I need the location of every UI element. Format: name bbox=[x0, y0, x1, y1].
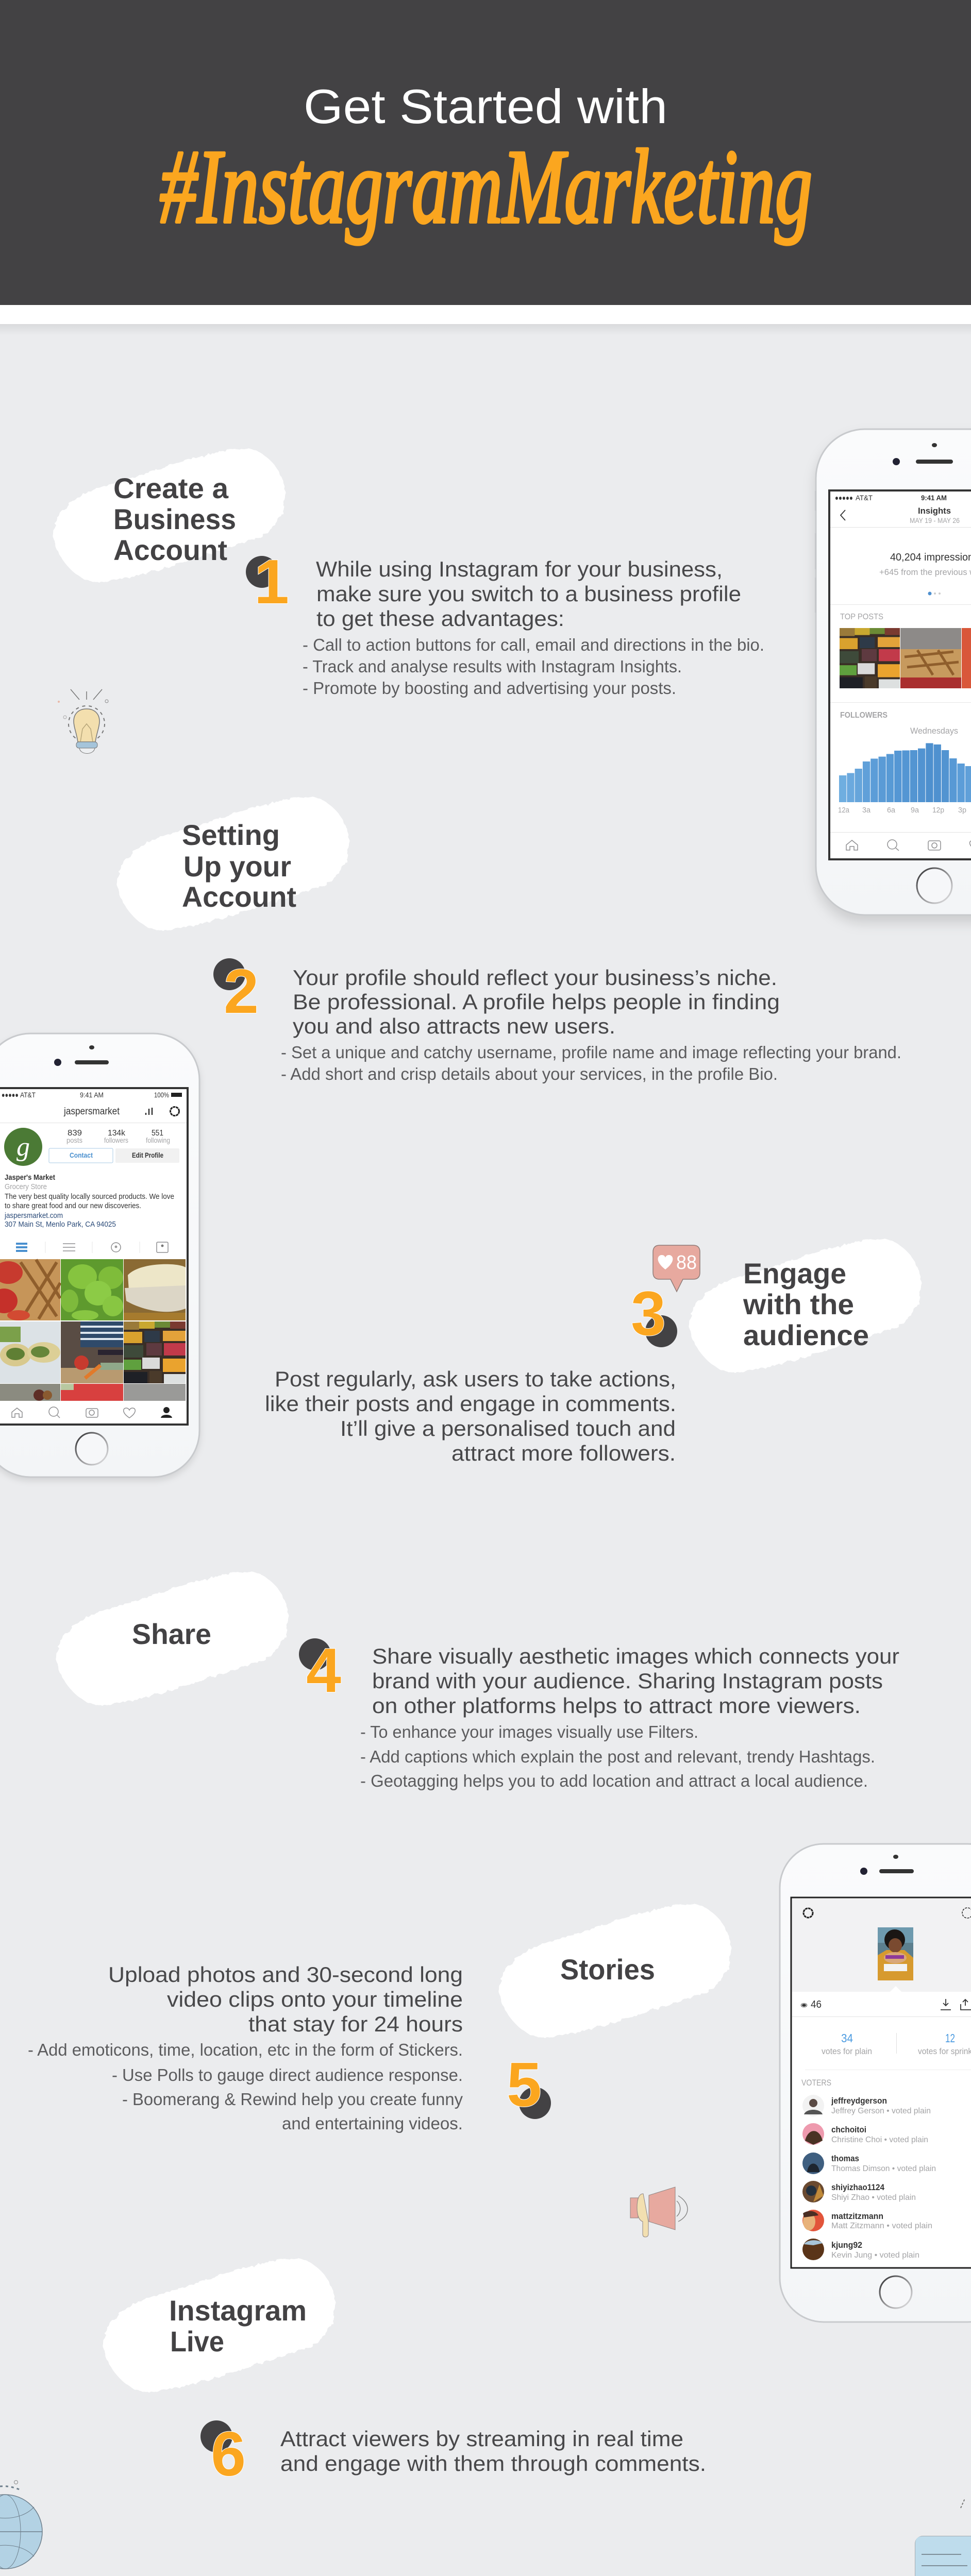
followers bar chart: FOLLOWERS bbox=[840, 711, 888, 720]
insights heading: MAY 19 - MAY 26 bbox=[910, 516, 960, 524]
bullet list: - Call to action buttons for call, email and directions in the bio. bbox=[303, 635, 764, 654]
avatar bbox=[4, 1128, 42, 1166]
profile stats: 551 bbox=[152, 1129, 163, 1138]
profile bio: Grocery Store bbox=[5, 1182, 47, 1191]
header band bbox=[0, 0, 971, 335]
status bar bbox=[835, 494, 947, 502]
story preview bbox=[792, 1899, 971, 1992]
followers bar chart: 3p bbox=[958, 806, 966, 815]
profile tabs bbox=[16, 1242, 168, 1253]
profile bio bbox=[4, 1173, 174, 1229]
voters list: Kevin Jung • voted plain bbox=[831, 2251, 919, 2260]
bullet list: - Promote by boosting and advertising your posts. bbox=[303, 679, 676, 698]
body text: Attract viewers by streaming in real time bbox=[280, 2427, 683, 2451]
body text: to get these advantages: bbox=[316, 606, 564, 631]
title line one: Get Started with bbox=[304, 79, 667, 133]
brush blob 4 bbox=[57, 1572, 288, 1705]
bullet list: and entertaining videos. bbox=[282, 2114, 463, 2133]
step 4: share bbox=[57, 1572, 899, 1790]
step 3: engage with the audience bbox=[265, 1239, 921, 1465]
body text: Be professional. A profile helps people in finding bbox=[293, 990, 780, 1014]
profile stats bbox=[66, 1129, 170, 1144]
insights heading: Insights bbox=[918, 506, 951, 516]
heading: Stories bbox=[560, 1953, 655, 1986]
voters list: VOTERS bbox=[801, 2078, 831, 2088]
bullet list: - Use Polls to gauge direct audience response. bbox=[112, 2065, 463, 2084]
bullet list: - Add emoticons, time, location, etc in the form of Stickers. bbox=[28, 2040, 463, 2059]
number 3: 3 bbox=[631, 1278, 666, 1348]
profile buttons: Contact bbox=[70, 1151, 93, 1159]
bullet list: - Set a unique and catchy username, profile name and image reflecting your brand. bbox=[281, 1043, 901, 1062]
voters list: chchoitoi bbox=[831, 2125, 866, 2134]
bullet list: - Boomerang & Rewind help you create funny bbox=[122, 2090, 463, 2109]
body text: video clips onto your timeline bbox=[167, 1987, 463, 2011]
body text: Upload photos and 30-second long bbox=[108, 1962, 463, 1987]
body text: make sure you switch to a business profile bbox=[316, 582, 741, 606]
phone: insights screen bbox=[815, 429, 971, 915]
heading: Account bbox=[113, 534, 227, 566]
heading bbox=[113, 472, 236, 566]
brush blob 6 bbox=[103, 2259, 335, 2392]
followers bar chart bbox=[838, 711, 971, 815]
top posts bbox=[830, 613, 971, 703]
voters list: Matt Zitzmann • voted plain bbox=[831, 2222, 932, 2230]
icon: megaphone bbox=[630, 2187, 688, 2237]
profile stats: 134k bbox=[108, 1129, 126, 1138]
vote counts: votes for plain bbox=[822, 2046, 872, 2056]
body text: like their posts and engage in comments. bbox=[265, 1392, 676, 1416]
voters list bbox=[801, 2078, 936, 2260]
bullet list: - Add short and crisp details about your services, in the profile Bio. bbox=[281, 1064, 778, 1083]
body text: Your profile should reflect your business’s niche. bbox=[293, 965, 777, 990]
status bar: 9:41 AM bbox=[921, 494, 947, 502]
voters list: Jeffrey Gerson • voted plain bbox=[831, 2107, 931, 2115]
bullet list bbox=[281, 1043, 901, 1083]
bullet list bbox=[28, 2040, 463, 2133]
bullet list bbox=[360, 1722, 875, 1790]
profile buttons: Edit Profile bbox=[132, 1151, 163, 1159]
icon: lightbulb bbox=[58, 689, 108, 753]
icon: globe bbox=[0, 2480, 42, 2569]
top posts: TOP POSTS bbox=[840, 613, 883, 621]
profile bio: Jasper's Market bbox=[5, 1173, 55, 1182]
body text bbox=[372, 1644, 899, 1718]
status bar: 100% bbox=[154, 1091, 169, 1099]
profile stats: 839 bbox=[68, 1129, 82, 1138]
body text: that stay for 24 hours bbox=[248, 2012, 463, 2036]
body text: you and also attracts new users. bbox=[293, 1014, 615, 1038]
profile bio: jaspersmarket.com bbox=[4, 1211, 63, 1220]
step 6: instagram live bbox=[103, 2259, 706, 2489]
views row: 46 bbox=[811, 1999, 822, 2010]
body text: on other platforms helps to attract more viewers. bbox=[372, 1693, 861, 1718]
voters list: Christine Choi • voted plain bbox=[831, 2136, 928, 2144]
phone: profile screen bbox=[0, 1033, 199, 1477]
heading bbox=[169, 2294, 307, 2358]
insights heading bbox=[830, 506, 971, 528]
heading: Engage bbox=[743, 1257, 846, 1290]
vote counts: 12 bbox=[945, 2031, 955, 2045]
step 5: stories bbox=[28, 1904, 731, 2133]
phone: story voters screen bbox=[780, 1844, 971, 2322]
views row bbox=[792, 1999, 971, 2017]
followers bar chart: 3a bbox=[862, 806, 871, 815]
voters list: kjung92 bbox=[831, 2240, 862, 2250]
brush blob 2 bbox=[118, 797, 349, 930]
heading: Share bbox=[132, 1618, 211, 1650]
profile buttons bbox=[49, 1148, 179, 1163]
status bar bbox=[2, 1091, 182, 1099]
profile bio: 307 Main St, Menlo Park, CA 94025 bbox=[5, 1220, 116, 1229]
number 4: 4 bbox=[306, 1635, 341, 1705]
followers bar chart: 6a bbox=[887, 806, 896, 815]
step 2: setting up your account bbox=[118, 797, 901, 1083]
icon: desktop monitor bbox=[915, 2499, 971, 2576]
profile header: jaspersmarket bbox=[63, 1106, 120, 1117]
heading bbox=[743, 1257, 869, 1351]
status bar: ●●●●● bbox=[2, 1091, 19, 1099]
bullet list bbox=[303, 635, 764, 698]
profile stats: posts bbox=[66, 1136, 82, 1144]
icon: like notification bubble: 88 bbox=[676, 1252, 697, 1274]
voters list: shiyizhao1124 bbox=[831, 2182, 884, 2192]
profile stats: following bbox=[146, 1136, 170, 1144]
number 1: 1 bbox=[254, 547, 289, 617]
body text: Post regularly, ask users to take actions, bbox=[275, 1367, 676, 1391]
bullet list: - Geotagging helps you to add location and attract a local audience. bbox=[360, 1771, 868, 1790]
heading: with the bbox=[743, 1288, 854, 1320]
body text: brand with your audience. Sharing Instagram posts bbox=[372, 1669, 883, 1693]
photo grid bbox=[0, 1259, 186, 1401]
number 6: 6 bbox=[211, 2419, 246, 2489]
body text: and engage with them through comments. bbox=[280, 2451, 706, 2476]
brush blob 1 bbox=[54, 449, 285, 582]
tab bar icons bbox=[12, 1407, 172, 1418]
heading bbox=[182, 819, 296, 913]
body text bbox=[316, 557, 741, 631]
voters list: Shiyi Zhao • voted plain bbox=[831, 2193, 916, 2202]
body text: Share visually aesthetic images which connects your bbox=[372, 1644, 899, 1668]
bullet list: - Add captions which explain the post and relevant, trendy Hashtags. bbox=[360, 1747, 875, 1766]
status bar: ●●●●● bbox=[835, 494, 853, 502]
followers bar chart: 12a bbox=[838, 806, 850, 815]
heading: Live bbox=[170, 2325, 224, 2358]
tab bar icons bbox=[830, 832, 971, 851]
heading: Up your bbox=[183, 850, 291, 883]
status bar: AT&T bbox=[856, 494, 873, 502]
status bar: AT&T bbox=[20, 1091, 36, 1099]
status bar: 9:41 AM bbox=[80, 1091, 104, 1099]
body text: While using Instagram for your business, bbox=[316, 557, 723, 581]
body text bbox=[293, 965, 780, 1038]
voters list: thomas bbox=[831, 2154, 859, 2163]
followers bar chart: Wednesdays bbox=[910, 726, 958, 736]
number 2: 2 bbox=[224, 956, 259, 1026]
body text: attract more followers. bbox=[451, 1441, 676, 1465]
body text bbox=[108, 1962, 463, 2036]
profile header bbox=[0, 1106, 187, 1123]
brush blob 5 bbox=[499, 1904, 731, 2038]
heading: Create a bbox=[113, 472, 229, 504]
impressions bbox=[830, 552, 971, 605]
heading: Instagram bbox=[169, 2294, 307, 2327]
bullet list: - To enhance your images visually use Filters. bbox=[360, 1722, 698, 1741]
bullet list: - Track and analyse results with Instagram Insights. bbox=[303, 657, 682, 676]
number 5: 5 bbox=[507, 2049, 542, 2120]
voters list: Thomas Dimson • voted plain bbox=[831, 2164, 936, 2173]
voters list: mattzitzmann bbox=[831, 2211, 883, 2221]
heading: Business bbox=[113, 503, 236, 535]
avatar: g bbox=[16, 1132, 30, 1162]
vote counts: 34 bbox=[841, 2031, 853, 2045]
body text bbox=[280, 2427, 706, 2476]
followers bar chart: 12p bbox=[932, 806, 944, 815]
heading: audience bbox=[743, 1319, 869, 1351]
followers bar chart: 9a bbox=[911, 806, 919, 815]
profile stats: followers bbox=[104, 1136, 128, 1144]
views row: ◉ bbox=[800, 2002, 808, 2008]
step 1: create a business account bbox=[54, 449, 764, 698]
icon: like notification bubble bbox=[653, 1245, 700, 1292]
profile bio: to share great food and our new discoveries. bbox=[5, 1201, 141, 1210]
vote counts bbox=[805, 2031, 971, 2070]
voters list: jeffreydgerson bbox=[831, 2096, 887, 2106]
heading: Setting bbox=[182, 819, 280, 851]
heading: Account bbox=[182, 880, 296, 913]
profile bio: The very best quality locally sourced products. We love bbox=[5, 1192, 174, 1201]
brush blob 3 bbox=[690, 1239, 921, 1372]
body text: It’ll give a personalised touch and bbox=[340, 1416, 676, 1440]
body text bbox=[265, 1367, 676, 1465]
